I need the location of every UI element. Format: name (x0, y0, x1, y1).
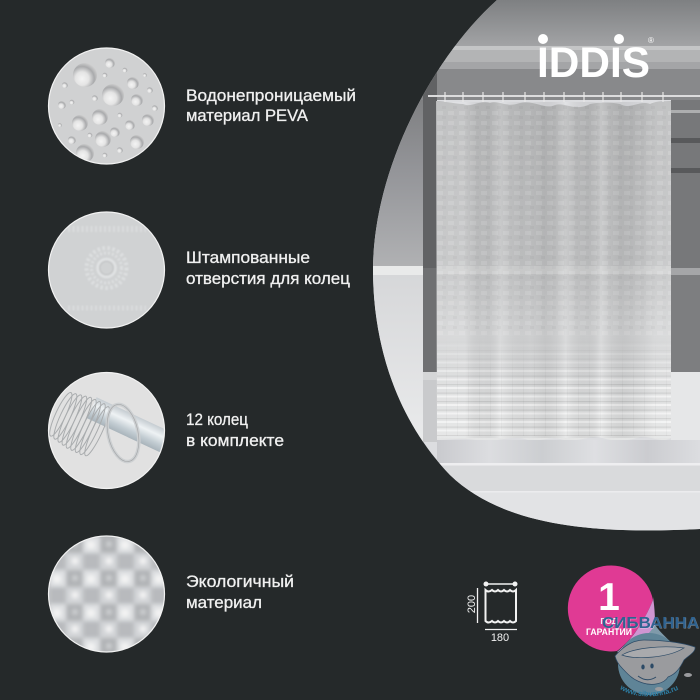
warranty badge (568, 565, 653, 651)
feature text 2: отверстия для колец (186, 270, 351, 288)
logo: IDDIS: ® (648, 36, 654, 45)
icon: curtain dimensions (466, 582, 518, 644)
warranty badge: ГОД (600, 616, 618, 626)
icon: curtain dimensions: 180 (491, 632, 509, 644)
watermark: sibvanna (602, 597, 700, 696)
curtain (436, 101, 671, 441)
feature text 4 (186, 573, 294, 612)
tub front and floor (437, 440, 700, 530)
warranty badge: ГАРАНТИИ (586, 627, 632, 637)
feature text 1: материал PEVA (186, 107, 308, 125)
feature text 4: Экологичный (186, 573, 294, 591)
feature photo: stamped ring hole (48, 212, 166, 328)
watermark: sibvanna: СИБВАННА (602, 615, 699, 632)
curtain rod and rings (428, 92, 700, 102)
feature photo: 3D cube texture (49, 536, 164, 652)
feature text 2: Штампованные (186, 249, 310, 267)
feature photo: water droplets (48, 48, 166, 164)
watermark: sibvanna: www.sibvanna.ru (620, 686, 678, 696)
bathroom photo with curtain (370, 0, 700, 540)
icon: curtain dimensions: 200 (466, 595, 478, 613)
feature text 3: в комплекте (186, 432, 284, 450)
logo: IDDIS: IDDIS (537, 39, 650, 87)
feature text 4: материал (186, 594, 262, 612)
feature text 3: 12 колец (186, 411, 248, 429)
warranty badge: 1 (598, 576, 620, 619)
feature text 1 (186, 87, 356, 125)
feature photo: rings on rod (49, 373, 164, 488)
watermark: sibvanna: СИБВАННА (602, 616, 700, 632)
feature text 1: Водонепроницаемый (186, 87, 356, 105)
feature text 3 (186, 411, 284, 450)
feature text 2 (186, 249, 351, 288)
